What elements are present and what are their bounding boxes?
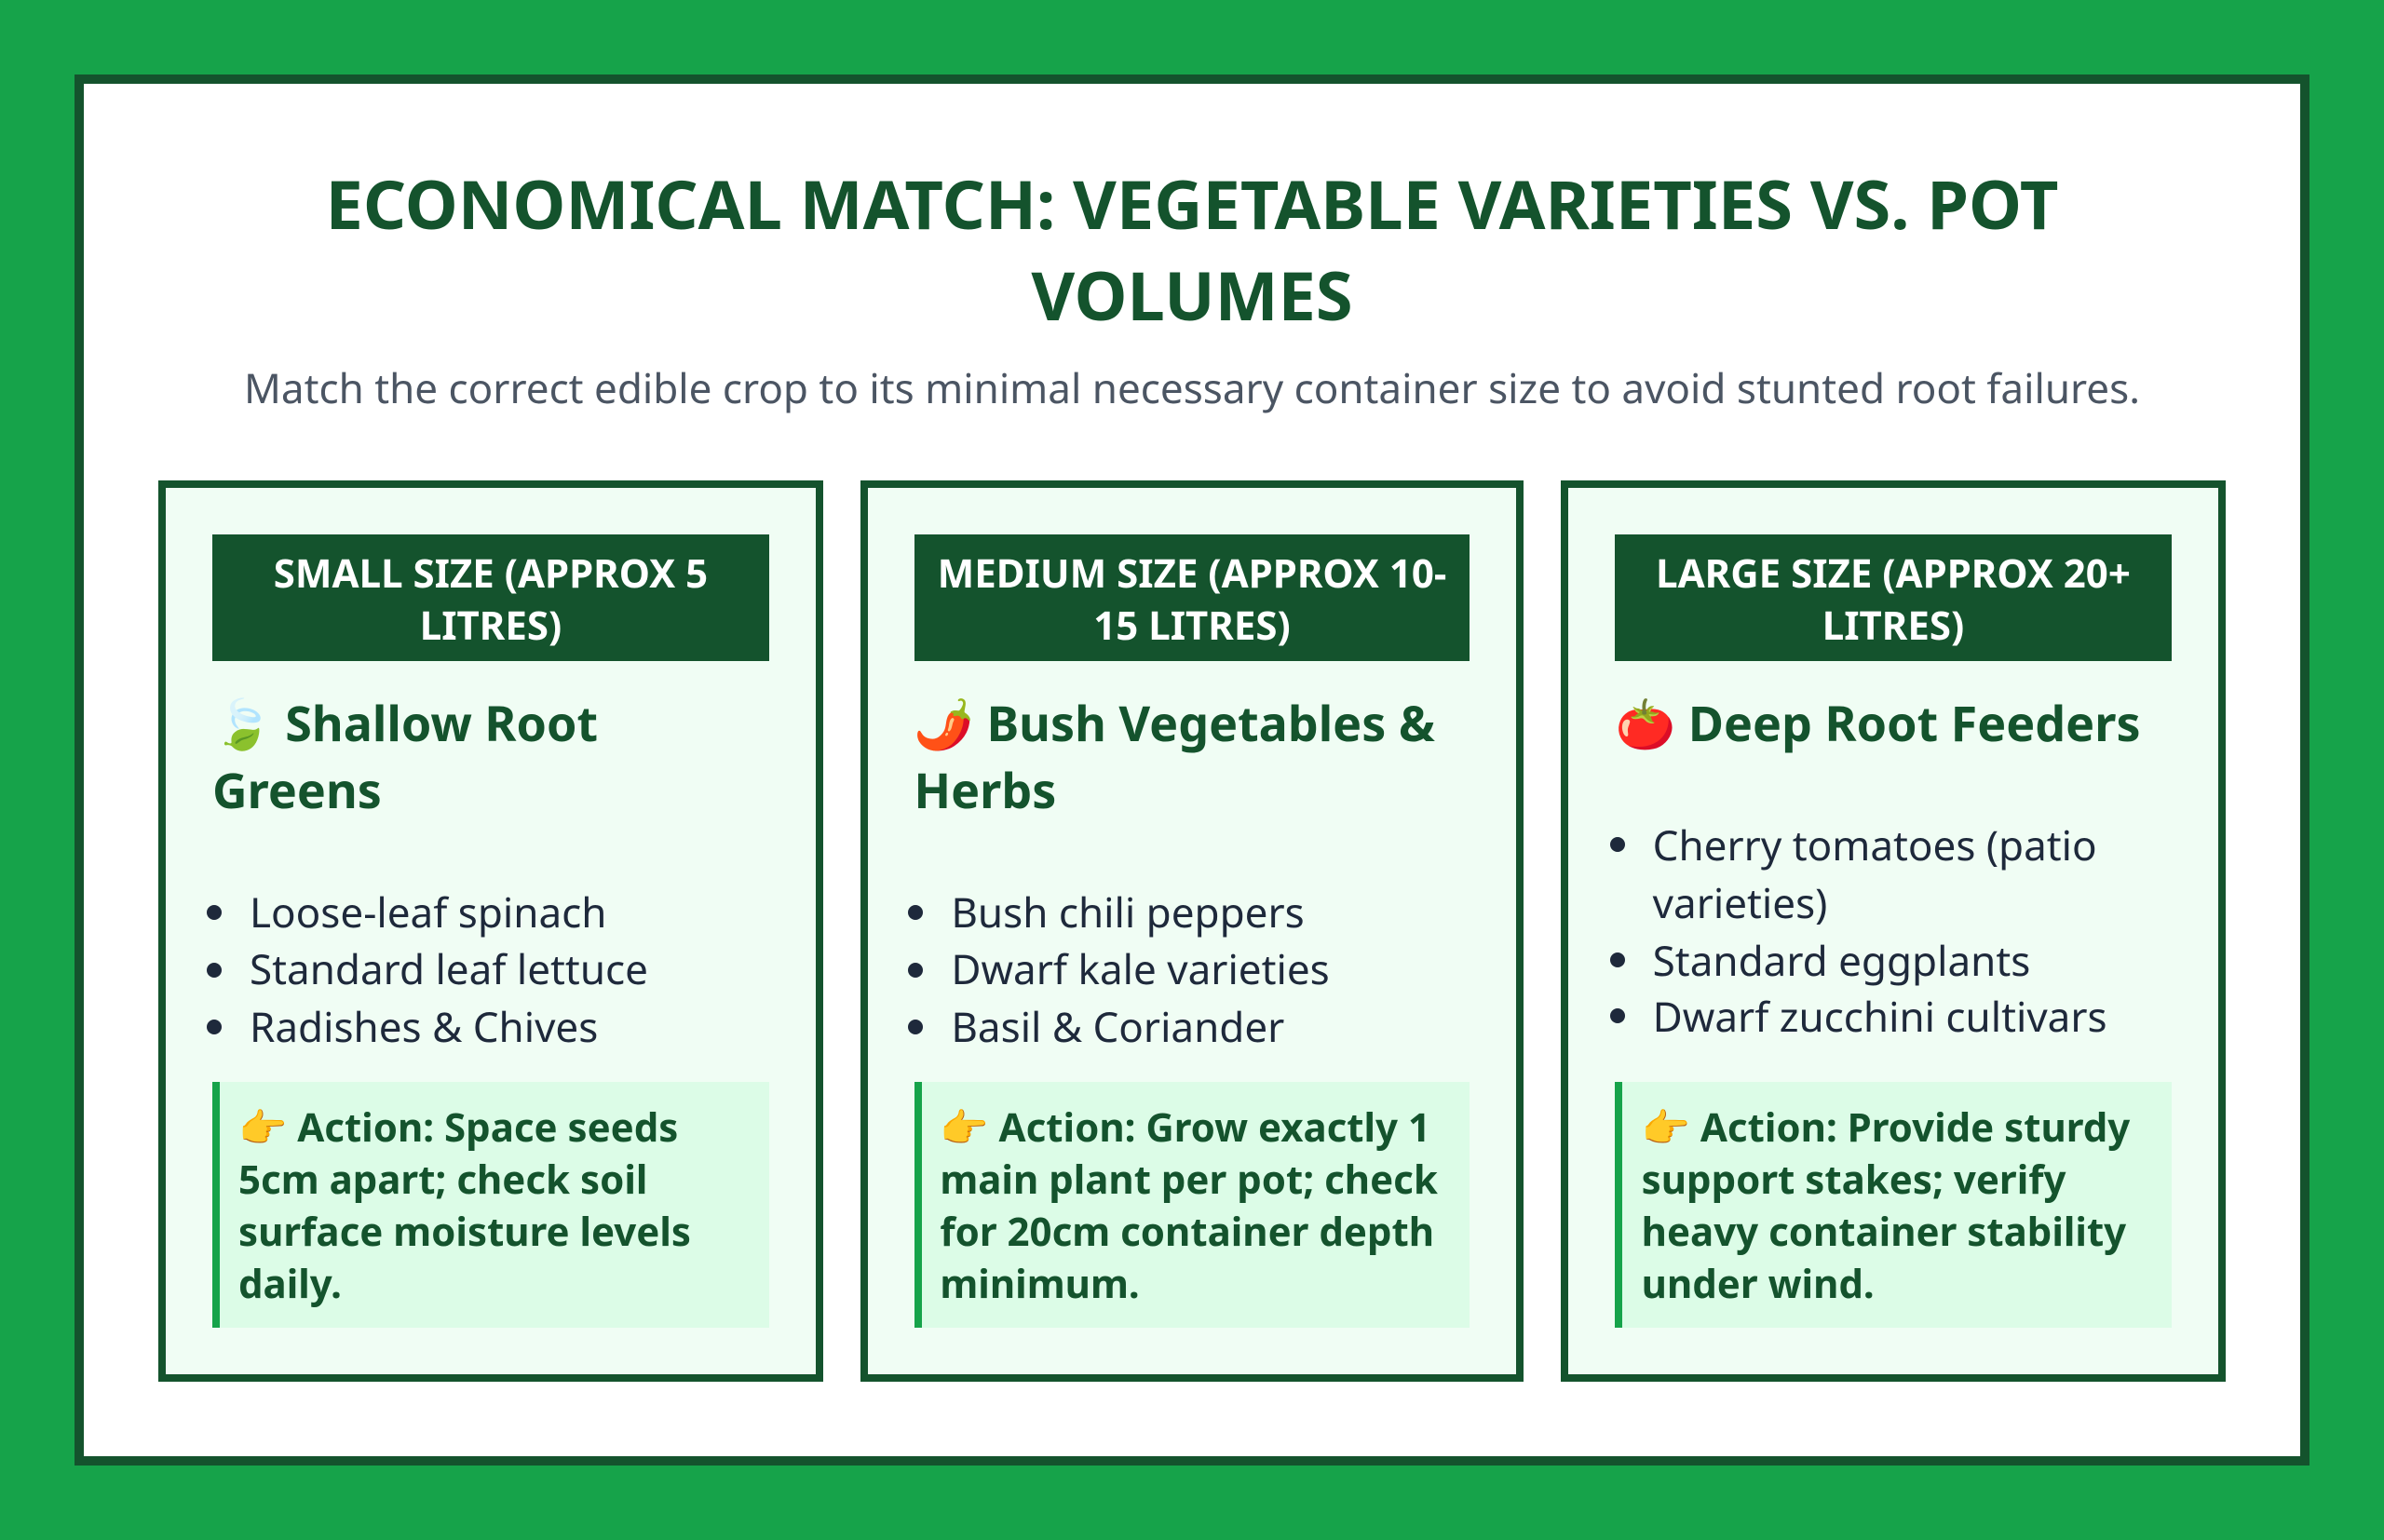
small size crop list: Standard leaf lettuce — [250, 940, 648, 996]
title: VOLUMES — [1031, 250, 1353, 341]
medium size header: MEDIUM SIZE (APPROX 10- — [938, 546, 1446, 600]
panel: small size — [158, 480, 823, 1382]
medium size heading with chili icon — [914, 690, 1435, 823]
small size header: LITRES) — [420, 598, 562, 652]
medium size crop list: Basil & Coriander — [951, 998, 1284, 1054]
small size crop list: Radishes & Chives — [250, 998, 598, 1054]
small size crop list: Loose-leaf spinach — [250, 884, 606, 939]
small size action callout: 5cm apart; check soil — [238, 1153, 647, 1206]
large size header: LARGE SIZE (APPROX 20+ — [1656, 546, 2131, 600]
small size crop list — [207, 884, 648, 1054]
small size action callout — [212, 1082, 769, 1328]
large size crop list: Dwarf zucchini cultivars — [1653, 988, 2107, 1044]
panel: large size — [1561, 480, 2226, 1382]
subtitle: Match the correct edible crop to its minimal necessary container size to avoid stunted root failures. — [244, 359, 2140, 415]
large size action callout: heavy container stability — [1642, 1205, 2126, 1258]
panel: medium size — [860, 480, 1524, 1382]
small size action callout: 👉 Action: Space seeds — [238, 1101, 678, 1154]
small size header: SMALL SIZE (APPROX 5 — [274, 546, 708, 600]
medium size action callout: minimum. — [940, 1257, 1140, 1310]
large size action callout: support stakes; verify — [1642, 1153, 2066, 1206]
medium size header: 15 LITRES) — [1093, 598, 1291, 652]
large size crop list: Standard eggplants — [1653, 932, 2030, 988]
small size heading with leaf icon — [212, 690, 598, 823]
small size action callout: daily. — [238, 1257, 342, 1310]
small size heading with leaf icon: Greens — [212, 757, 382, 823]
medium size crop list: Bush chili peppers — [951, 884, 1305, 939]
medium size action callout: main plant per pot; check — [940, 1153, 1438, 1206]
large size heading with tomato icon: 🍅 Deep Root Feeders — [1616, 690, 2141, 756]
small size action callout: surface moisture levels — [238, 1205, 691, 1258]
large size crop list: varieties) — [1653, 874, 1827, 930]
medium size header — [914, 534, 1470, 661]
medium size heading with chili icon: Herbs — [914, 757, 1056, 823]
large size action callout: under wind. — [1642, 1257, 1875, 1310]
title: ECONOMICAL MATCH: VEGETABLE VARIETIES VS. POT — [325, 158, 2059, 250]
large size header: LITRES) — [1822, 598, 1964, 652]
small size header — [212, 534, 769, 661]
title — [325, 158, 2059, 341]
large size crop list: Cherry tomatoes (patio — [1653, 817, 2097, 872]
medium size action callout: 👉 Action: Grow exactly 1 — [940, 1101, 1430, 1154]
medium size crop list — [908, 884, 1330, 1054]
large size action callout: 👉 Action: Provide sturdy — [1642, 1101, 2130, 1154]
large size header — [1615, 534, 2172, 661]
medium size action callout: for 20cm container depth — [940, 1205, 1434, 1258]
medium size crop list: Dwarf kale varieties — [951, 940, 1330, 996]
medium size action callout — [914, 1082, 1470, 1328]
large size action callout — [1615, 1082, 2172, 1328]
medium size heading with chili icon: 🌶️ Bush Vegetables & — [914, 690, 1435, 756]
small size heading with leaf icon: 🍃 Shallow Root — [212, 690, 598, 756]
large size crop list — [1610, 817, 2107, 1044]
